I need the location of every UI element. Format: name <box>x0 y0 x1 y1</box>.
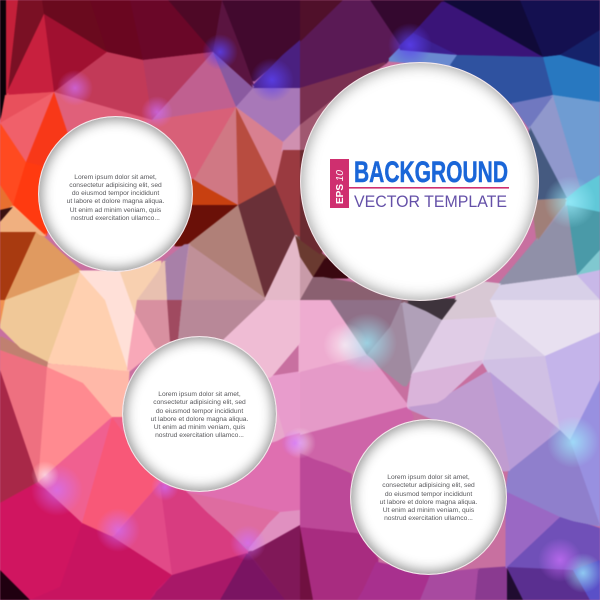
text block: Ut enim ad minim veniam, quis <box>154 424 245 431</box>
panel: text circle middle <box>122 336 277 492</box>
text block: do eiusmod tempor incididunt <box>385 491 472 498</box>
text block: Ut enim ad minim veniam, quis <box>70 207 161 214</box>
text block <box>380 474 477 522</box>
badge: EPS 10 <box>330 159 349 208</box>
panel: text circle top left <box>38 116 193 272</box>
text block: nostrud exercitation ullamco... <box>155 432 244 439</box>
text block: Lorem ipsum dolor sit amet, <box>158 391 241 398</box>
text block: consectetur adipisicing elit, sed <box>69 182 162 189</box>
text block: ut labore et dolore magna aliqua. <box>151 416 248 423</box>
panel: large title circle <box>300 62 539 301</box>
text block: ut labore et dolore magna aliqua. <box>380 499 477 506</box>
text block <box>151 391 248 439</box>
text block: consectetur adipisicing elit, sed <box>382 482 475 489</box>
text block: Ut enim ad minim veniam, quis <box>383 507 474 514</box>
text block: do eiusmod tempor incididunt <box>156 408 243 415</box>
text block: Lorem ipsum dolor sit amet, <box>387 474 470 481</box>
text block: nostrud exercitation ullamco... <box>384 515 473 522</box>
text block: nostrud exercitation ullamco... <box>71 215 160 222</box>
text block <box>67 174 164 222</box>
panel: text circle bottom right <box>350 419 507 575</box>
text block: do eiusmod tempor incididunt <box>72 190 159 197</box>
logo: background vector template <box>330 159 509 209</box>
text block: consectetur adipisicing elit, sed <box>153 399 246 406</box>
text block: ut labore et dolore magna aliqua. <box>67 198 164 205</box>
badge: EPS 10: EPS 10 <box>335 170 346 204</box>
text block: Lorem ipsum dolor sit amet, <box>74 174 157 180</box>
